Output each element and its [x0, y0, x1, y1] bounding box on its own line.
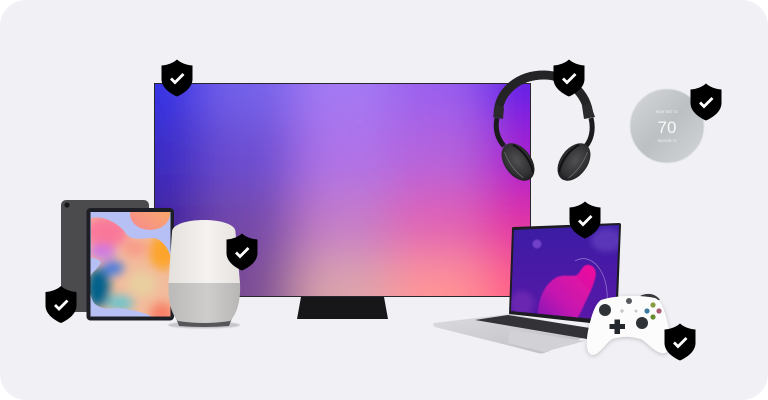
TV screen gradient	[155, 84, 530, 296]
left hinge	[496, 118, 504, 146]
right pad end	[582, 103, 595, 119]
shield: speaker	[226, 234, 258, 270]
tablet back	[61, 200, 149, 312]
face buttons	[644, 302, 662, 320]
headphones	[493, 75, 597, 187]
TV stand	[297, 297, 388, 319]
laptop lid	[509, 223, 621, 326]
shield: headphones	[554, 60, 584, 96]
headband	[498, 75, 589, 116]
laptop screen	[511, 225, 619, 319]
speaker body	[168, 220, 240, 283]
thermostat bottom label: INDOOR 72	[658, 139, 676, 143]
d-pad	[610, 320, 625, 334]
controller bumper	[640, 294, 660, 300]
menu buttons	[620, 309, 638, 313]
speaker base	[176, 318, 232, 327]
thermostat temperature: 70	[658, 118, 676, 137]
right hinge	[586, 118, 592, 146]
left pad end	[493, 104, 504, 119]
right ear cup	[551, 137, 597, 187]
laptop keyboard	[475, 315, 590, 339]
tablet camera	[64, 202, 70, 208]
shield: TV	[162, 60, 192, 96]
left stick	[599, 304, 611, 316]
shield: controller	[664, 324, 696, 360]
smart speaker	[168, 220, 240, 328]
tablet wallpaper	[90, 212, 170, 316]
laptop front reflection	[508, 330, 585, 352]
TV bezel	[154, 83, 531, 297]
shield: tablet	[46, 286, 76, 323]
TV	[154, 83, 531, 319]
game controller	[587, 294, 670, 355]
laptop base	[433, 314, 601, 354]
laptop wallpaper blob	[538, 265, 596, 325]
thermostat top label: HEAT SET TO	[656, 110, 678, 114]
right stick	[636, 317, 648, 329]
speaker fabric	[168, 283, 240, 323]
shield: thermostat	[690, 84, 722, 120]
controller body	[587, 296, 670, 355]
xbox button	[626, 298, 632, 304]
thermostat	[630, 89, 704, 163]
left ear cup	[495, 137, 541, 187]
shield: laptop	[570, 202, 600, 238]
laptop	[433, 222, 625, 354]
tablet front	[86, 208, 174, 320]
